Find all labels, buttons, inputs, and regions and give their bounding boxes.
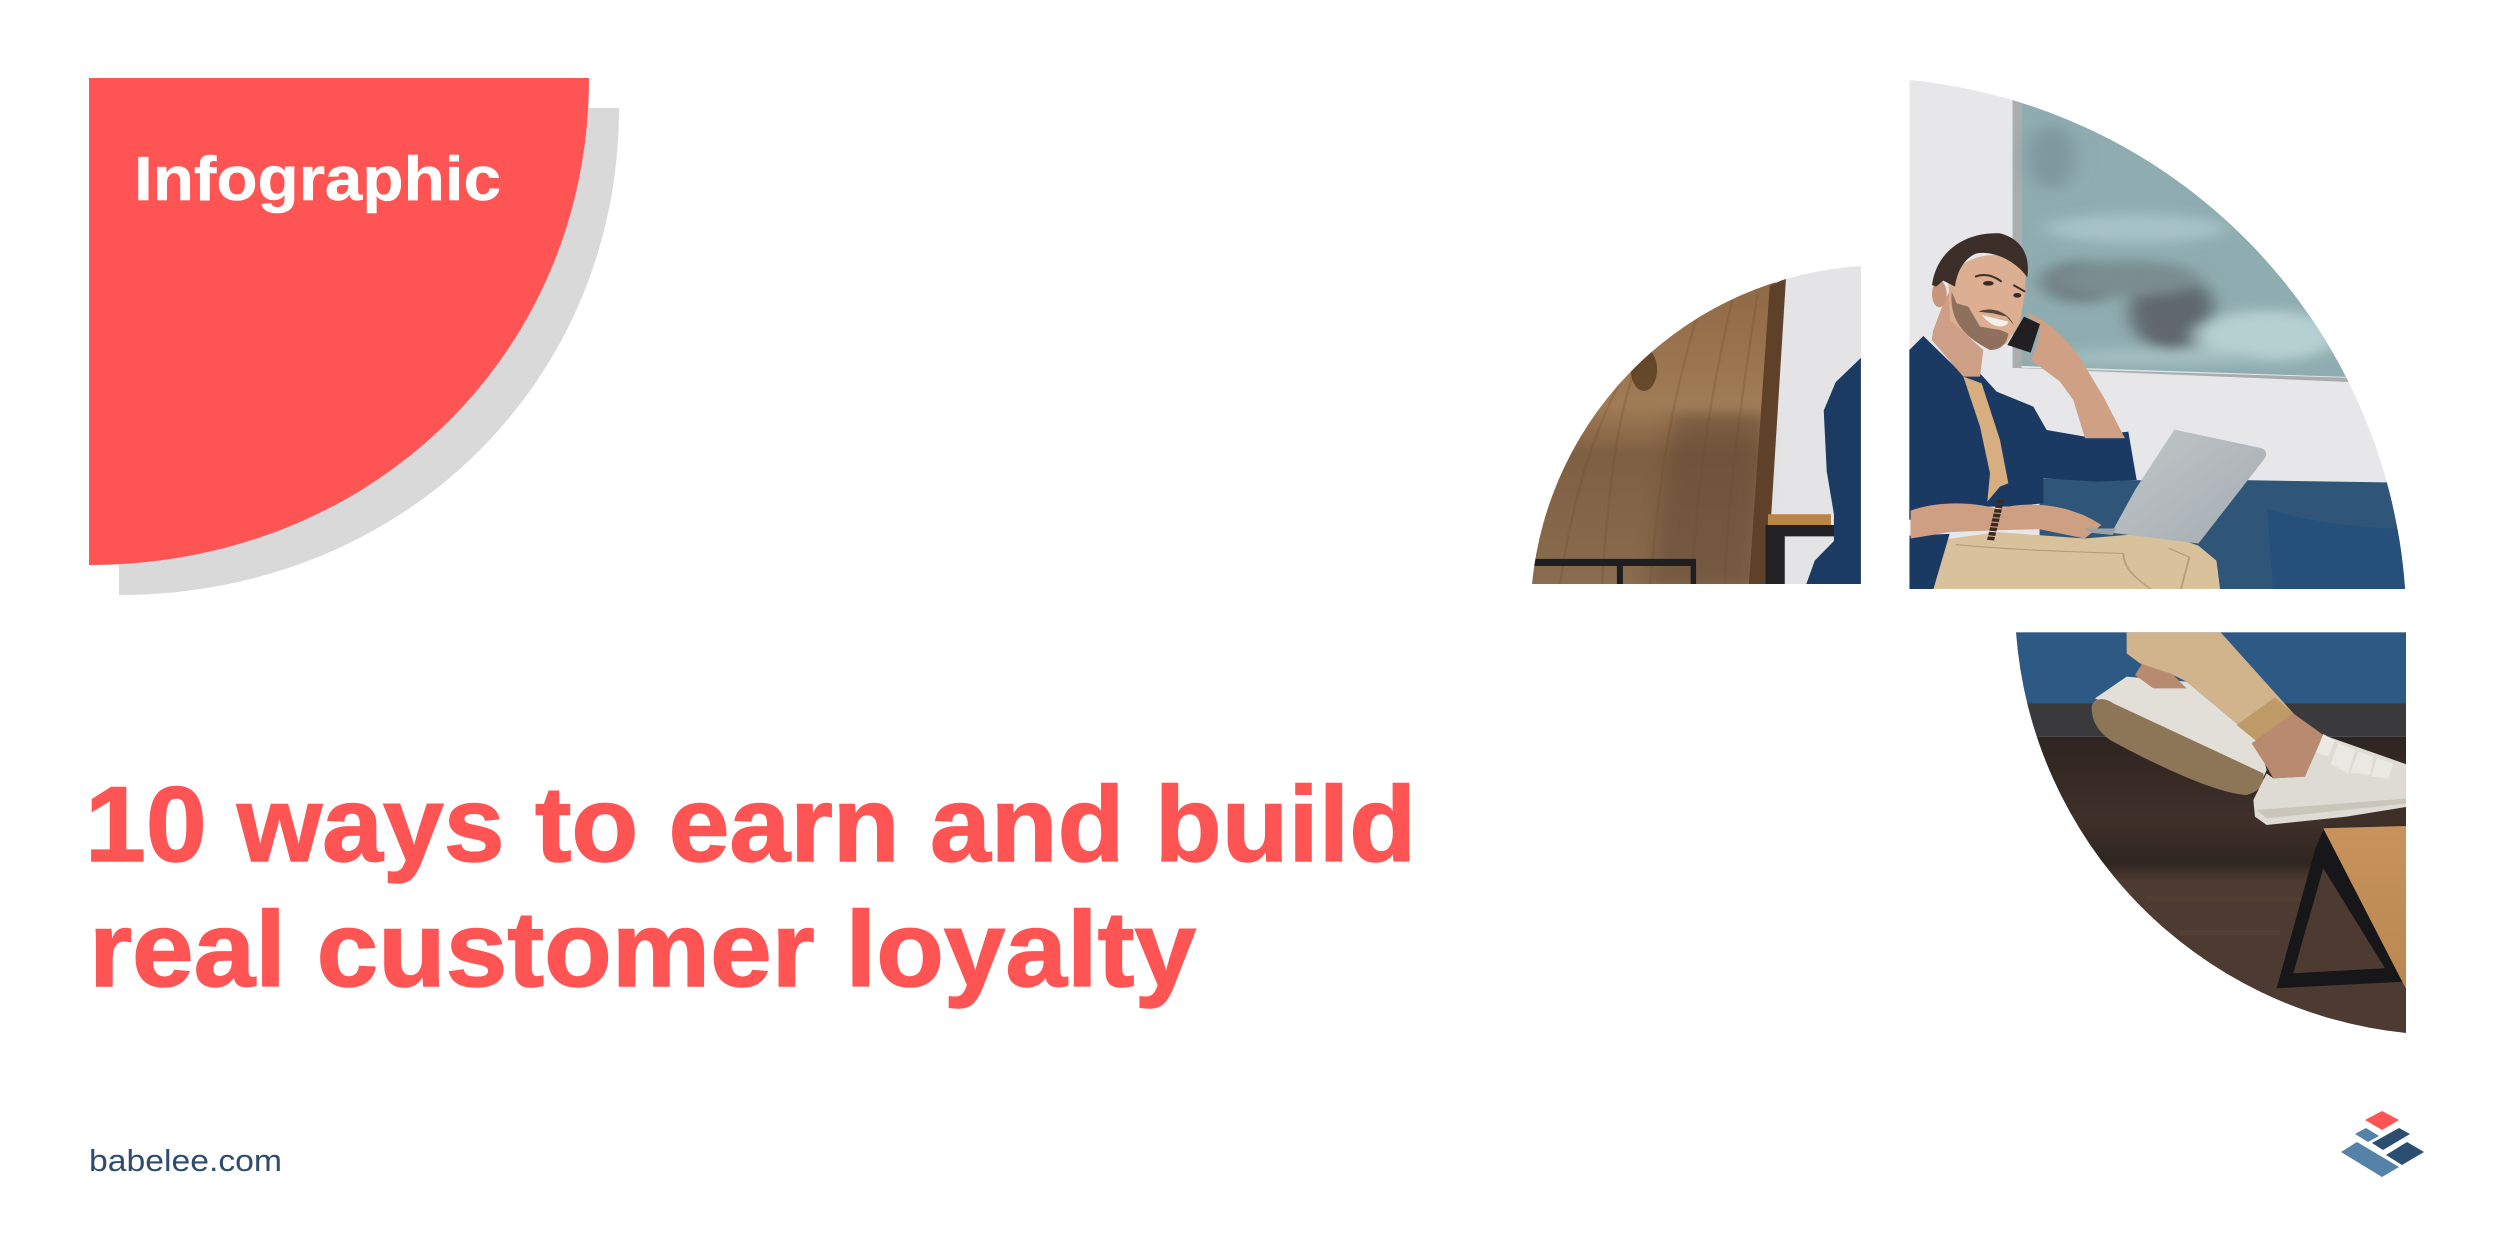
photo segment: man on the phone with laptop xyxy=(1909,71,2423,593)
website url: babelee.com xyxy=(89,1143,282,1178)
shoe sole stripe xyxy=(2257,798,2408,818)
badge red quarter circle xyxy=(89,78,589,565)
floor planks xyxy=(2147,897,2313,935)
table frame xyxy=(2277,830,2408,1005)
photo segment: wood panel and shoulder xyxy=(1532,266,1861,584)
wood grain xyxy=(1560,293,1758,586)
wall xyxy=(1771,266,1861,584)
sofa seat xyxy=(2010,632,2408,703)
badge label: Infographic xyxy=(134,145,501,214)
trousers xyxy=(2127,632,2294,744)
laptop xyxy=(2111,430,2266,544)
forearm and hand xyxy=(1911,503,2101,539)
logo icon xyxy=(2341,1111,2424,1177)
photo segment: crossed legs, shoes and coffee table xyxy=(2010,632,2408,1037)
neck xyxy=(1932,287,1983,377)
painting xyxy=(2020,103,2346,377)
wall xyxy=(1910,80,2387,539)
title line 2: real customer loyalty xyxy=(89,889,1196,1009)
chair seat xyxy=(1768,514,1831,525)
upper ankle xyxy=(2135,662,2187,688)
title xyxy=(85,764,1416,1009)
face xyxy=(1948,255,2026,350)
velcro straps xyxy=(2316,734,2393,778)
smile xyxy=(1982,315,2008,327)
hair xyxy=(1932,233,2028,287)
trousers xyxy=(1932,532,2221,593)
trouser cuff xyxy=(2237,697,2294,744)
raised shoe upper xyxy=(2095,677,2267,782)
table frame xyxy=(1533,559,1696,585)
wood shade xyxy=(1650,414,1764,586)
person shoulder xyxy=(1806,358,1861,586)
title line 1: 10 ways to earn and build xyxy=(85,764,1416,884)
wood panel xyxy=(1532,282,1776,584)
badge shadow xyxy=(119,108,619,595)
raised shoe sole xyxy=(2092,699,2264,795)
sofa back xyxy=(2040,479,2411,593)
lower shirt xyxy=(1909,534,1950,591)
laptop base xyxy=(2085,529,2116,535)
ear xyxy=(1932,281,1947,307)
t-shirt xyxy=(1963,377,2008,502)
table opening xyxy=(2293,868,2385,973)
shirt xyxy=(1909,336,2137,520)
wood knot xyxy=(1631,348,1657,391)
brows and eyes xyxy=(1975,275,2025,292)
bracelet xyxy=(1990,500,2001,541)
chair legs xyxy=(1766,525,1835,586)
trouser folds xyxy=(1956,545,2189,591)
table top xyxy=(2323,826,2408,988)
floor xyxy=(2010,737,2408,1037)
sofa frame xyxy=(2010,703,2408,737)
moustache xyxy=(1978,309,2014,325)
sofa pillow xyxy=(2267,509,2408,593)
hand and arm xyxy=(2012,313,2125,438)
ankle xyxy=(2252,713,2323,778)
painting frame edge xyxy=(2013,98,2351,382)
badge: quarter circle with shadow and label xyxy=(89,78,619,595)
beard xyxy=(1951,292,2008,350)
lower shoe xyxy=(2253,735,2408,825)
phone xyxy=(2007,317,2040,353)
wood dark edge xyxy=(1749,279,1786,586)
